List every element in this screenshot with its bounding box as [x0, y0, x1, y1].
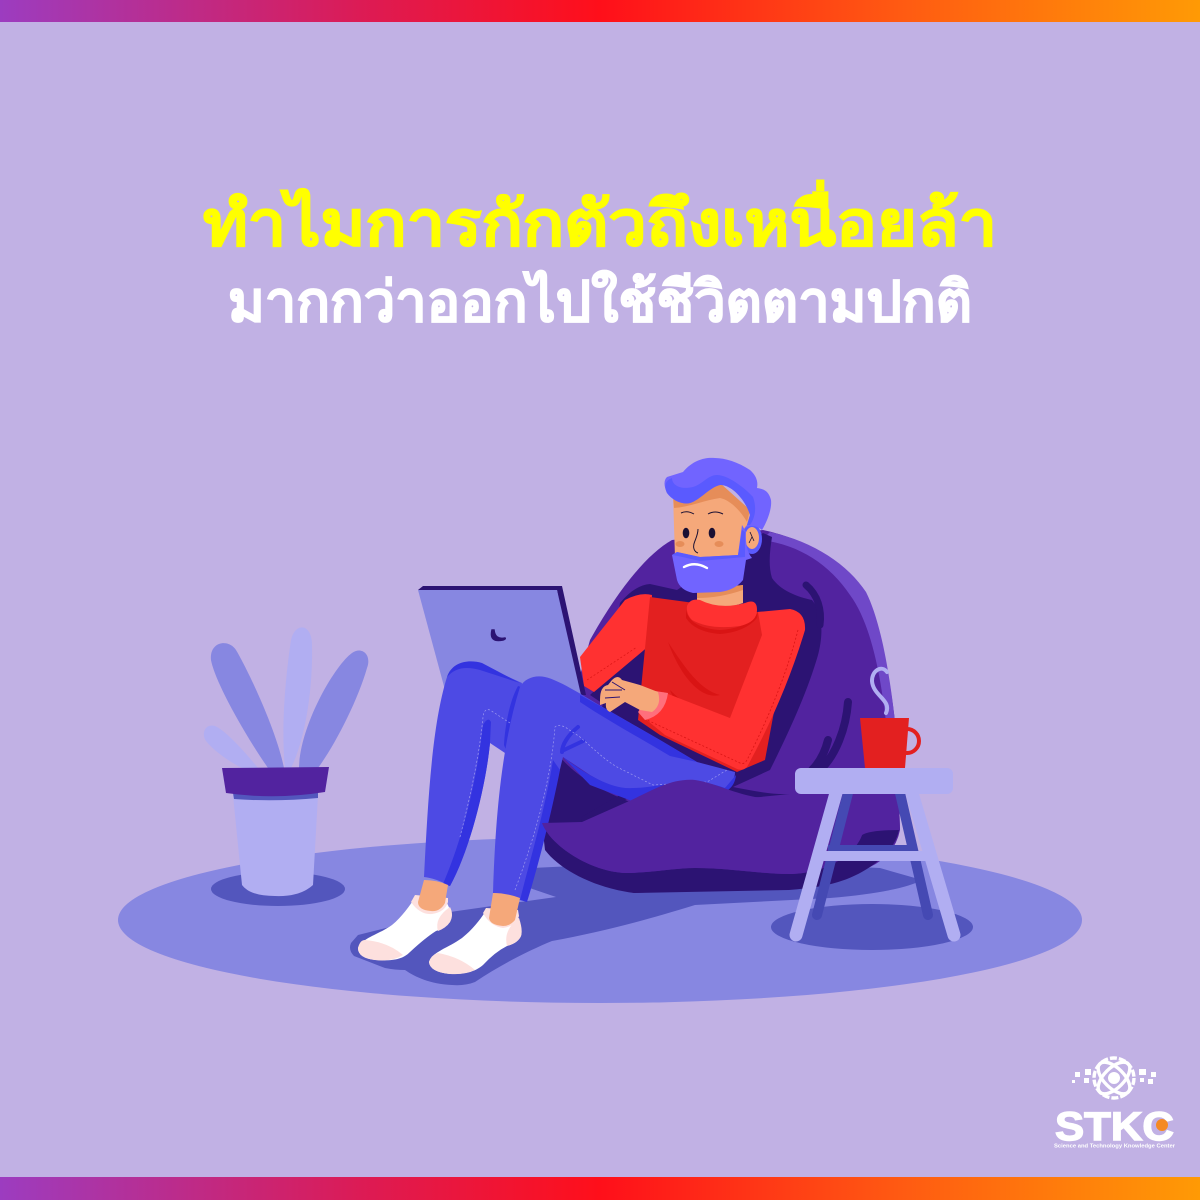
stool back bar — [828, 845, 917, 851]
ear — [742, 524, 762, 554]
face — [673, 483, 750, 565]
left leaf — [211, 643, 284, 768]
near leg underside — [563, 757, 736, 808]
near leg stitching — [515, 726, 727, 890]
steam — [872, 669, 887, 713]
collar — [687, 600, 757, 627]
right shoe — [429, 912, 522, 974]
cuff — [638, 691, 668, 720]
dark gap below arm — [590, 648, 668, 742]
stool front legs — [796, 793, 954, 935]
title — [203, 180, 997, 333]
sleeve stitching — [647, 630, 798, 764]
near leg shape — [493, 676, 735, 900]
collar shadow — [686, 610, 758, 634]
logo pixels — [1072, 1069, 1156, 1084]
bottom gradient bar — [0, 1177, 1200, 1200]
right hand and cuff — [600, 677, 668, 720]
plant — [204, 627, 368, 906]
far leg knee edge — [447, 661, 520, 683]
right ankle — [489, 893, 520, 926]
near leg top edge — [580, 695, 697, 762]
top gradient bar — [0, 0, 1200, 22]
lower dark behind leg — [545, 757, 630, 830]
right leaf — [299, 651, 368, 768]
fingers lines — [605, 682, 625, 698]
near leg — [493, 676, 736, 902]
forehead shadow — [673, 483, 750, 522]
far leg — [424, 661, 524, 886]
logo atom centre — [1108, 1072, 1120, 1084]
floor shadow under man and bean bag — [350, 860, 922, 985]
ground ellipse — [118, 837, 1082, 1003]
right sleeve — [643, 609, 805, 770]
hand — [600, 677, 659, 712]
left foot — [358, 880, 452, 960]
ear skin — [745, 527, 759, 549]
title line 2: มากกว่าออกไปใช้ชีวิตตามปกติ — [228, 269, 972, 333]
stool crossbar — [821, 851, 928, 861]
left ankle — [418, 880, 448, 911]
bean bag — [542, 530, 900, 893]
logo — [1054, 1057, 1176, 1150]
pot shadow — [211, 872, 345, 906]
mouth — [684, 564, 707, 568]
neck — [697, 585, 743, 607]
fold strokes right — [806, 585, 820, 625]
bag body — [542, 530, 900, 893]
far leg shape — [424, 664, 522, 886]
right foot — [429, 893, 522, 974]
torso — [638, 597, 793, 772]
pot band shadow — [233, 793, 318, 800]
far leg inner dark — [443, 686, 524, 886]
neck shadow — [697, 585, 743, 598]
bag bottom shadow — [542, 823, 899, 893]
right shoe toe — [429, 953, 475, 974]
title line 1: ทำไมการกักตัวถึงเหนื่อยล้า — [203, 180, 997, 259]
knee crease — [562, 727, 583, 752]
left arm sleeve — [580, 594, 652, 692]
pot body — [233, 795, 318, 896]
man — [358, 458, 900, 974]
bag front lobe over hips — [542, 740, 900, 874]
ear detail — [749, 532, 754, 543]
stool top — [795, 768, 953, 794]
mug handle — [895, 729, 919, 753]
logo atom — [1093, 1057, 1135, 1099]
mug — [860, 669, 919, 768]
right shoe heel — [506, 918, 522, 946]
pot rim — [222, 767, 329, 796]
hair — [664, 458, 771, 530]
cheeks — [676, 541, 724, 547]
small left leaf — [204, 725, 258, 768]
eyes — [683, 528, 715, 538]
beard — [672, 525, 752, 593]
eyebrows and nose — [681, 512, 723, 553]
laptop — [418, 586, 586, 695]
fold strokes near stool — [812, 702, 848, 770]
stool back legs — [817, 793, 928, 915]
left shoe collar — [411, 895, 448, 914]
left shoe — [358, 898, 451, 960]
left sleeve stitching — [587, 647, 637, 680]
laptop edge — [418, 586, 586, 695]
left shoe heel — [437, 907, 452, 931]
torso folds — [668, 642, 730, 720]
mug body — [860, 718, 909, 768]
far leg stitching — [460, 710, 510, 837]
stool shadow — [771, 904, 973, 950]
beard dark edge — [672, 530, 745, 561]
centre leaf — [283, 627, 312, 768]
bag folds shadow behind torso — [600, 533, 821, 800]
logo tagline: Science and Technology Knowledge Center — [1054, 1144, 1176, 1150]
laptop moon logo — [491, 630, 505, 641]
stool — [795, 768, 954, 935]
bag highlight edge — [762, 532, 897, 740]
right shoe collar — [483, 908, 519, 928]
near leg outer dark — [520, 760, 560, 902]
bag fold stroke left — [585, 792, 632, 819]
hair dark lock — [665, 475, 755, 525]
hair main — [664, 458, 771, 530]
laptop lid — [418, 590, 581, 695]
logo wordmark: STKC — [1055, 1105, 1174, 1149]
logo dot — [1156, 1119, 1168, 1131]
left shoe toe — [358, 940, 403, 960]
